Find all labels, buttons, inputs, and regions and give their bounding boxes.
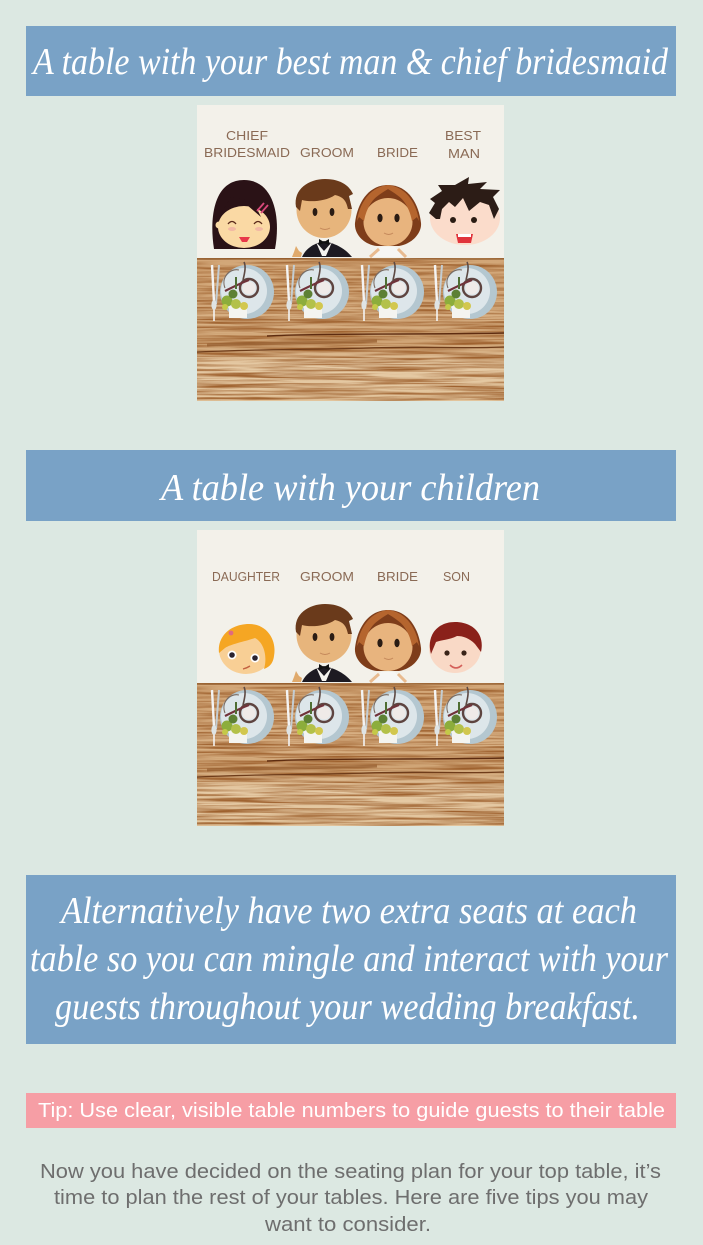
closing paragraph: time to plan the rest of your tables. Here are five tips you may [54, 1187, 648, 1209]
labels row: MAN [448, 146, 480, 161]
labels row [204, 128, 481, 161]
character: best man [429, 177, 500, 245]
heading: children: A table with your children [158, 467, 540, 509]
tip banner: Tip: Use clear, visible table numbers to guide guests to their table [38, 1099, 665, 1122]
callout: extra seats: Alternatively have two extra seats at each [58, 890, 637, 932]
heading: best man and chief bridesmaid [26, 26, 676, 96]
place settings [211, 262, 497, 321]
labels row: SON [443, 569, 470, 584]
labels row: CHIEF [226, 128, 268, 143]
illustration: table with children [197, 530, 504, 826]
character: bride [355, 185, 421, 257]
character: bride [355, 610, 421, 682]
labels row: BRIDE [377, 569, 418, 584]
labels row [212, 569, 470, 584]
labels row: BEST [445, 128, 481, 143]
character: daughter [219, 624, 275, 674]
character: son [429, 622, 482, 673]
labels row: BRIDE [377, 145, 418, 160]
labels row: DAUGHTER [212, 569, 280, 584]
character: chief bridesmaid [212, 180, 277, 249]
labels row: GROOM [300, 145, 354, 160]
wooden table [197, 258, 504, 401]
heading: children [26, 450, 676, 521]
character: groom [292, 604, 353, 682]
closing paragraph: want to consider. [264, 1214, 431, 1236]
closing paragraph [40, 1161, 661, 1236]
illustration: table with best man and chief bridesmaid [197, 105, 504, 401]
labels row: BRIDESMAID [204, 145, 290, 160]
character: groom [292, 179, 353, 257]
callout: extra seats: guests throughout your wedding breakfast. [55, 986, 640, 1028]
labels row: GROOM [300, 569, 354, 584]
place settings [211, 687, 497, 746]
wooden table [197, 683, 504, 826]
callout: extra seats [26, 875, 676, 1044]
closing paragraph: Now you have decided on the seating plan for your top table, it’s [40, 1161, 661, 1183]
tip banner [26, 1093, 676, 1128]
